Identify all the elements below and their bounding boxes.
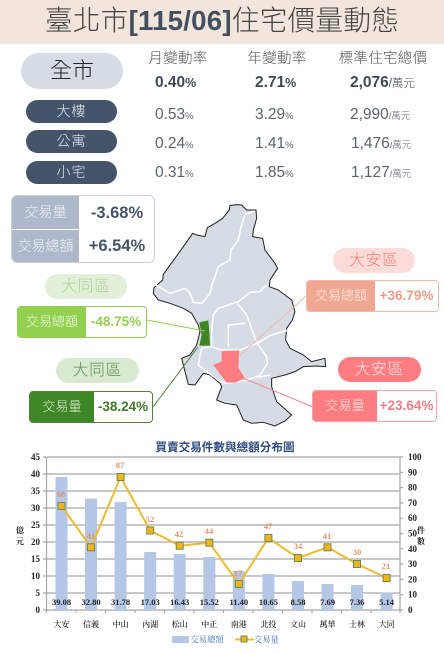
tag: Daan volume (338, 357, 421, 382)
volume data labels: 42 (175, 529, 183, 539)
amount data labels: 17.03 (141, 597, 160, 607)
amount data labels: 7.69 (320, 597, 335, 607)
category labels: 中正 (201, 619, 217, 629)
combo chart (16, 439, 425, 644)
category labels: 信義 (83, 619, 99, 629)
right axis labels: 20 (408, 574, 418, 584)
legend: 交易總額 (190, 634, 224, 644)
row: high-rise values (155, 106, 410, 123)
tag: Datong amount: 大同區 (61, 278, 111, 295)
right axis unit (417, 525, 425, 546)
amount data labels: 39.08 (52, 597, 71, 607)
value: +23.64% (380, 398, 433, 413)
left axis labels: 0 (36, 605, 40, 615)
amount data labels: 11.40 (229, 597, 248, 607)
row: high-rise values: 2,990/萬元 (350, 106, 410, 123)
label (307, 281, 375, 311)
gridlines (43, 457, 403, 613)
tag: Datong volume: 大同區 (73, 362, 122, 379)
label: 交易量 (325, 398, 364, 413)
line: transaction volume (58, 474, 390, 588)
amount data labels: 15.52 (200, 597, 219, 607)
chart title: 買賣交易件數與總額分布圖 (155, 439, 295, 455)
right axis unit: 數 (417, 536, 425, 546)
left axis labels: 40 (31, 469, 40, 479)
left axis labels: 30 (31, 503, 40, 513)
right axis labels: 100 (408, 452, 422, 462)
city-wide pill: 全市 (50, 58, 94, 83)
pill: apartment (26, 130, 117, 153)
label: 交易量 (42, 399, 82, 414)
row: high-rise values: 0.53% (155, 106, 194, 123)
label (30, 392, 94, 422)
label: 交易總額 (315, 288, 367, 303)
pill: small unit (26, 161, 117, 184)
volume data labels: 52 (146, 514, 154, 524)
amount data labels: 10.65 (259, 597, 278, 607)
category labels: 文山 (290, 619, 306, 629)
right axis labels: 60 (408, 513, 418, 523)
category labels: 南港 (231, 619, 247, 629)
left axis unit (16, 525, 25, 546)
tag: Daan amount: 大安區 (349, 252, 399, 269)
tag: Daan volume: 大安區 (355, 361, 404, 378)
amount data labels: 5.14 (379, 597, 395, 607)
district: Daan (213, 350, 245, 383)
volume data labels: 34 (294, 541, 303, 551)
right axis unit: 件 (417, 525, 425, 535)
left axis labels: 20 (31, 537, 40, 547)
category labels (54, 619, 395, 629)
right axis labels: 70 (408, 498, 418, 508)
right axis labels: 10 (408, 590, 418, 600)
header banner (0, 0, 444, 44)
volume data labels: 68 (57, 489, 65, 499)
label: volume: 交易量 (24, 204, 66, 220)
value: total amount: +6.54% (89, 237, 145, 255)
panel: city-wide transactions (11, 195, 155, 263)
legend: 交易量 (254, 634, 279, 644)
amount data labels (52, 597, 395, 607)
volume data labels: 17 (234, 568, 243, 578)
amount data labels: 31.78 (111, 597, 130, 607)
column heading: standard total price: 標準住宅總價 (339, 51, 427, 67)
value: -48.75% (91, 314, 141, 329)
right axis labels (408, 452, 422, 615)
row: apartment values (155, 135, 411, 152)
amount data labels: 32.80 (81, 597, 101, 607)
left axis labels: 10 (31, 571, 40, 581)
pill: small unit: 小宅 (56, 164, 86, 180)
leader lines (147, 296, 313, 407)
pill: apartment: 公寓 (56, 133, 86, 149)
right axis labels: 90 (408, 467, 418, 477)
category labels: 大同 (379, 619, 395, 629)
row: small unit values: 1.85% (255, 164, 294, 181)
legend (172, 634, 279, 644)
row: apartment values: 1.41% (255, 135, 294, 152)
row: city-wide values: 0.40% (155, 74, 196, 91)
row: city-wide values: 2,076/萬元 (350, 74, 415, 91)
value: +36.79% (380, 288, 433, 303)
amount data labels: 7.36 (350, 597, 364, 607)
callout: Datong amount (17, 306, 147, 338)
value: -38.24% (98, 399, 148, 414)
label: total amount (12, 230, 79, 263)
row: small unit values: 0.31% (155, 164, 194, 181)
tag: Datong volume (56, 358, 139, 383)
category labels: 大安 (54, 619, 70, 629)
city-wide pill (21, 53, 123, 89)
amount data labels: 8.58 (291, 597, 305, 607)
label: volume (12, 196, 79, 229)
left axis labels (31, 452, 40, 615)
row: apartment values: 0.24% (155, 135, 194, 152)
right axis labels: 40 (408, 544, 418, 554)
left axis labels: 15 (31, 554, 40, 564)
column heading: monthly change: 月變動率 (148, 51, 208, 67)
label: 交易總額 (26, 314, 78, 329)
category labels: 萬華 (320, 619, 336, 629)
volume data labels: 21 (382, 561, 390, 571)
category labels: 北投 (260, 619, 276, 629)
row: city-wide values: 2.71% (255, 74, 296, 91)
row: apartment values: 1,476/萬元 (351, 135, 411, 152)
label (18, 307, 86, 337)
district borders (156, 211, 288, 383)
right axis labels: 0 (408, 605, 413, 615)
right axis labels: 50 (408, 528, 418, 538)
volume data labels: 41 (87, 531, 95, 541)
callout: Daan volume (312, 390, 437, 422)
callout: Daan amount (306, 280, 439, 312)
left axis labels: 25 (31, 520, 40, 530)
amount data labels: 16.43 (170, 597, 189, 607)
left axis labels: 35 (31, 486, 40, 496)
volume data labels: 41 (323, 531, 331, 541)
value: volume: -3.68% (91, 204, 143, 222)
bars: total amount (56, 477, 393, 610)
volume data labels: 30 (353, 547, 361, 557)
category labels: 內湖 (142, 619, 158, 629)
volume data labels (57, 460, 390, 578)
category labels: 士林 (349, 619, 365, 629)
volume data labels: 44 (205, 526, 214, 536)
row: small unit values (155, 164, 411, 181)
tag: Datong amount (45, 274, 127, 299)
city outline (153, 205, 326, 426)
category labels: 中山 (113, 619, 129, 629)
row: high-rise values: 3.29% (255, 106, 294, 123)
left axis unit: 億 (16, 525, 25, 535)
tag: Daan amount (333, 248, 415, 273)
column heading: yearly change: 年變動率 (247, 51, 307, 67)
pill: high-rise (26, 100, 117, 123)
callout: Datong volume (29, 391, 153, 423)
volume data labels: 47 (264, 521, 273, 531)
label: total amount: 交易總額 (18, 238, 74, 254)
district: Datong (199, 320, 210, 346)
label (313, 391, 377, 421)
row: small unit values: 1,127/萬元 (351, 164, 411, 181)
title: 臺北市[115/06]住宅價量動態 (45, 5, 399, 36)
left axis labels: 45 (31, 452, 40, 462)
volume data labels: 87 (116, 460, 125, 470)
category labels: 松山 (172, 619, 188, 629)
pill: high-rise: 大樓 (56, 103, 86, 119)
right axis labels: 80 (408, 483, 418, 493)
left axis unit: 元 (16, 536, 24, 546)
right axis labels: 30 (408, 559, 418, 569)
row: city-wide values (155, 74, 415, 91)
left axis labels: 5 (36, 588, 40, 598)
